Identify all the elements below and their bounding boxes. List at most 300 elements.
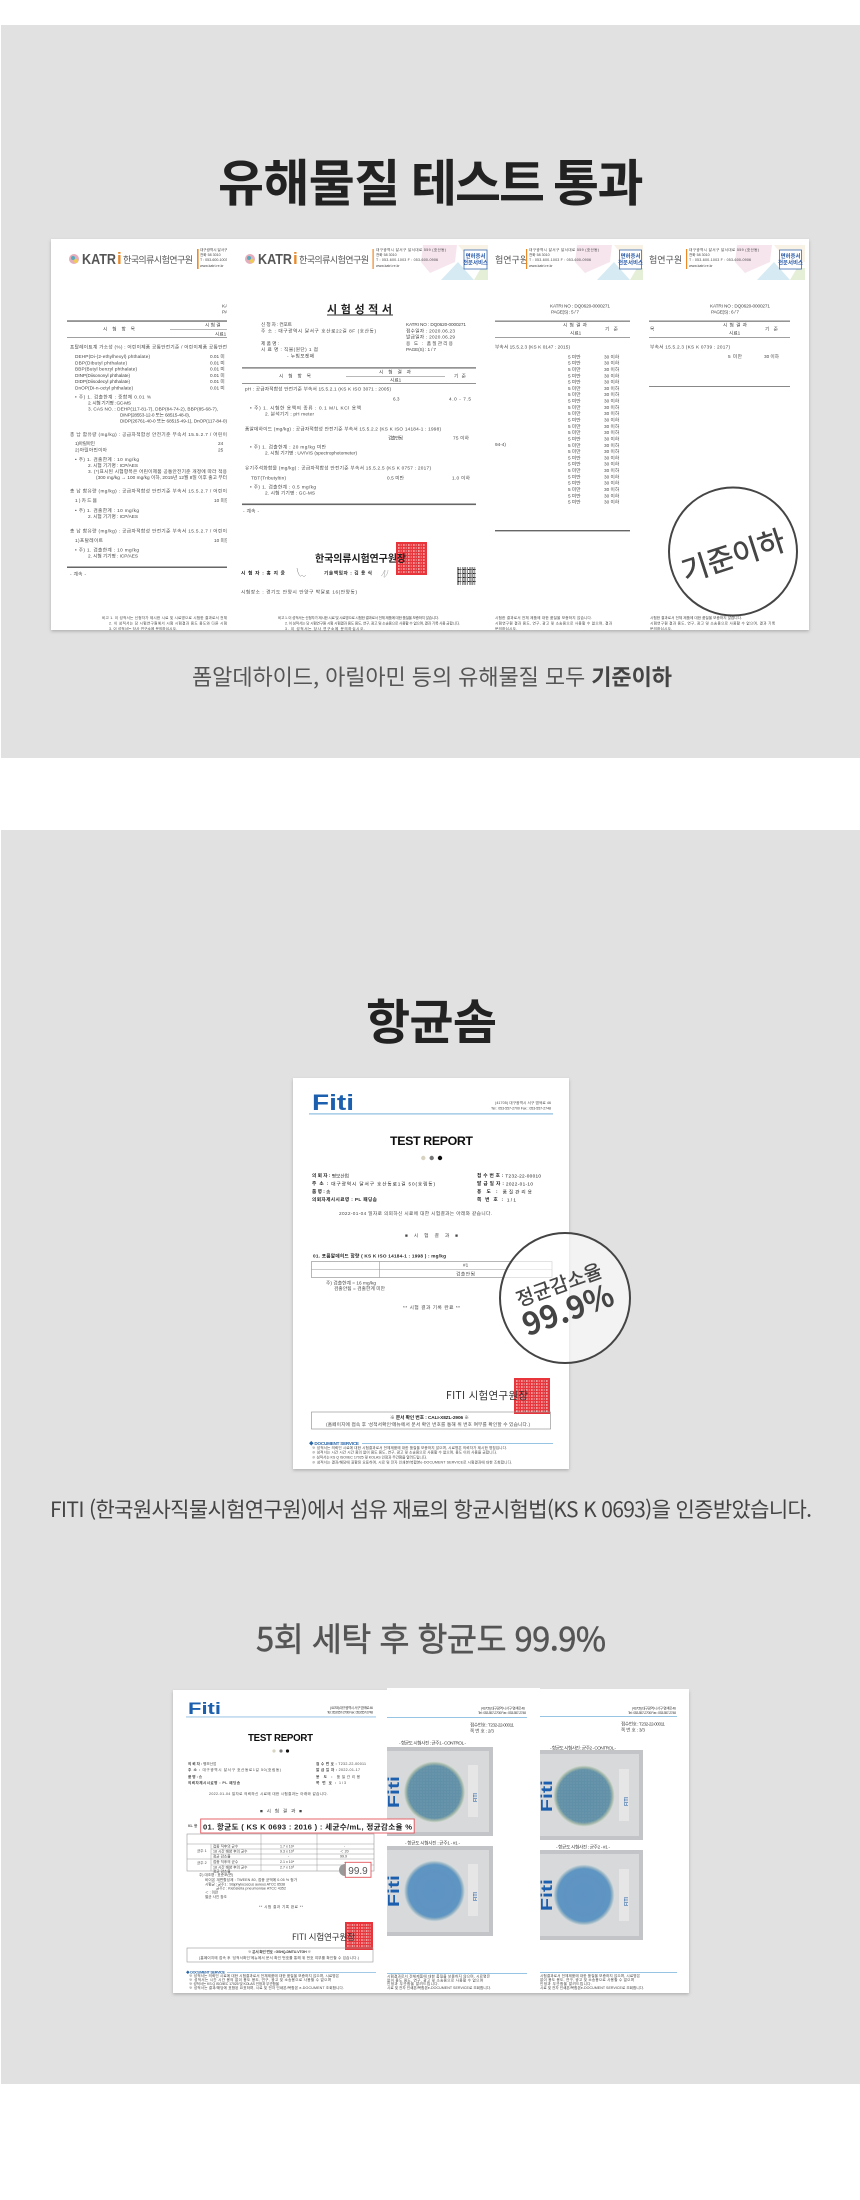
photo: control dish strain 2: Fiti: [539, 1780, 556, 1812]
results table: 정균 감소율: [213, 1854, 231, 1858]
report page 2: main test certificate: 전화 58 3010: [376, 252, 397, 257]
report page 1: 시 험 결: [205, 322, 221, 328]
report page 2: main test certificate: 2. 시험 기기명 : GC-MS: [265, 490, 315, 496]
report page 2: main test certificate: 검출안됨: [388, 434, 403, 442]
report page 2: main test certificate: [227, 239, 495, 631]
wash report page 1: test report with highlighted result: FITI 시험연구원장: [292, 1931, 355, 1943]
report page 2: main test certificate: 0.5 미만: [387, 474, 405, 482]
results table: 정균 감소율: [213, 1868, 231, 1874]
wash report page 1: test report with highlighted result: Fiti: [188, 1699, 221, 1718]
report page 1: 10 미만: [214, 497, 230, 504]
wash report page 2: strain 1 photos: (41705) 대구광역시 서구 염색로 46: [481, 1706, 525, 1710]
report page 3: 대구광역시 달서구 달서대로 559 (호산동): [529, 247, 599, 252]
report page 2: main test certificate: 6.3: [393, 396, 400, 402]
report page 2: main test certificate: 한국의류시험연구원: [299, 255, 369, 265]
report page 1: 비고 1. 이 성적서는 신청자가 제시한 시료 및 시료명으로 시험한 결과로서 전체: [102, 615, 227, 620]
report page 1: 0.01 미: [210, 378, 225, 385]
photo: treated dish strain 2: FITI: [624, 1897, 630, 1906]
stamp: below standard: [669, 488, 797, 616]
report page 2: main test certificate: 유기주석화합물 (mg/kg) : 공급자적합성 안전기준 부속서 15.5.2.5 (KS K 0757 : 2017): [245, 464, 431, 472]
report page 3: 30 이하: [604, 416, 620, 423]
report page 1: PA: [222, 310, 229, 314]
report page 1: 2)아릴아민이아: [75, 446, 108, 454]
report page 3: 5 미만: [568, 479, 581, 486]
report page 4: 면허증서: [781, 252, 800, 260]
report page 2: main test certificate: 용 도 : 품질관리용: [406, 340, 454, 347]
photo: control dish strain 1: Fiti: [386, 1776, 403, 1808]
results table: 접종 직후의 균수: [213, 1844, 239, 1848]
report page 3: 시료1: [570, 330, 582, 336]
report page 3: 5 미만: [568, 441, 581, 448]
report page 3: 5 미만: [568, 473, 581, 480]
report page 1: i: [117, 249, 122, 268]
results table: 접종 직후의 균수: [213, 1859, 239, 1864]
wash report page 1: test report with highlighted result: 의 뢰 자 : 평보산업: [188, 1761, 216, 1766]
callout: antibacterial test item highlight: 01. 항균도 ( KS K 0693 : 2016 ) : 세균수/mL, 정균감소율 %: [203, 1822, 412, 1832]
photo: control dish strain 2: [539, 1750, 643, 1840]
report page 3: 험연구원: [495, 255, 528, 265]
report page 1: KATR: [82, 251, 116, 268]
results table: 2.7 x 10⁶: [280, 1866, 295, 1870]
FITI test report document: ■ 시 험 결 과 ■: [405, 1232, 458, 1239]
report page 2: main test certificate: 시 료 명 : 직물(원단) 1 점: [261, 346, 318, 353]
result table: 검출안됨: [456, 1270, 475, 1278]
FITI test report document: ※ 성적서는 KS Q ISO/IEC 17025 및 KOLAS 인정과 무관함을 알려드립니다.: [312, 1454, 427, 1459]
report page 2: main test certificate: 시 험 결 과: [379, 368, 412, 376]
report page 2: main test certificate: 2. 이 성적서는 당 시험연구원 시험 시험결과 용도 용도, 연구, 광고 및 소송용으로 사용할 수 없으며, 결과 기록 사용 금합니다.: [285, 620, 460, 626]
wash test report pages: [173, 1688, 689, 1993]
report page 1: 25: [218, 448, 224, 452]
report page 1: DIDP(Diisodecyl phthalate): [75, 379, 130, 384]
wash report page 1: test report with highlighted result: ※ 성적서는 결과/해당에 표함된 요표하며, 시료 및 전자 인쇄본/복합본 e-DOCUMENT 조회합니다.: [189, 1985, 344, 1990]
wash report page 3: strain 2 photos: - 항균도 시험사진 : 균주2 - CONTROL -: [550, 1744, 616, 1752]
result table: #1: [463, 1262, 469, 1268]
report page 2: main test certificate: • 주) 1. 검출한계 : 0.5 mg/kg: [250, 484, 316, 490]
wash report page 3: strain 2 photos: 접수번호 : T232-22-00011: [621, 1720, 665, 1728]
seal: KATRI director stamp: [396, 542, 427, 575]
stamp: bacteria reduction rate 99.9%: 정균감소율: [511, 1255, 606, 1313]
report page 1: • 주) 1. 검출한계 : 10 mg/kg: [75, 456, 139, 463]
report page 3: 30 이하: [604, 467, 620, 474]
wash report page 1: test report with highlighted result: 주 소 : 대구광역시 달서구 호산동로1길 50(호림동): [188, 1767, 281, 1772]
wash report page 2: strain 1 photos: - 항균도 시험사진 : 균주1 - #1 -: [405, 1840, 460, 1846]
report page 4: 기 준: [765, 326, 779, 332]
report page 3: 시험연구원 결과 용도, 연구, 광고 및 소송용으로 사용할 수 없으며, 결과: [495, 620, 613, 626]
heading: harmful substance test passed: 유해물질: [218, 144, 413, 216]
FITI test report document: 쪽 번 호 : 1/1: [477, 1196, 516, 1203]
report page 2: main test certificate: 75 이하: [453, 434, 470, 442]
wash report page 2: strain 1 photos: - 항균도 시험사진 : 균주1 - CONTROL -: [399, 1740, 466, 1746]
panel: antibacterial cotton: [1, 830, 860, 2084]
report page 3: 5 미만: [568, 384, 581, 391]
FITI test report document: 의뢰자제시시료명 : PL 패딩솜: [312, 1196, 378, 1203]
report page 3: 5 미만: [568, 486, 581, 492]
report page 4: 대구광역시 달서구 달서대로 559 (호산동): [689, 247, 759, 252]
report page 3: 30 이하: [604, 372, 620, 379]
report page 2: main test certificate: 신 청 자 : 컨포트: [261, 321, 293, 328]
report page 4: [649, 239, 809, 631]
report page 2: main test certificate: 폼알데하이드 (mg/kg) : 공급자적합성 안전기준 부속서 15.5.2.2 (KS K ISO 14184-1 : 1998): [245, 426, 441, 432]
report page 1: 전화 58 3010: [200, 252, 221, 257]
report page 2: main test certificate: 시 험 자 : 홍 지 윤: [241, 570, 286, 576]
wash report page 1: test report with highlighted result: Tel : 053-557-2700 Fax : 053-557-2748: [327, 1710, 373, 1714]
report page 1: 2. 이 성적서는 당 시험연구원에서 시험 시험결과 용도 용도와 다른 시험: [109, 620, 227, 626]
report page 3: 30 이하: [604, 410, 620, 417]
photo: treated dish strain 1: Fiti: [386, 1875, 403, 1907]
report page 3: 30 이하: [604, 448, 620, 455]
FITI test report document: ※ 성적서는 의뢰인 시료에 대한 시험결과로서 전체제품에 대한 품질을 보증하지 않으며, 시료명은 의뢰자가 제시한 명칭입니다.: [312, 1445, 507, 1450]
wash report page 3: strain 2 photos: - 항균도 시험사진 : 균주2 - #1 -: [556, 1844, 610, 1850]
report page 1: 0.01 미: [210, 384, 225, 392]
results table: ＜ 20: [340, 1850, 349, 1854]
report page 3: 5 미만: [568, 403, 581, 410]
FITI test report document: ◆ DOCUMENT SERVICE: [309, 1441, 359, 1446]
wash report page 1: test report with highlighted result: ＜ : 미만: [205, 1890, 219, 1894]
report page 3: 부속서 15.5.2.3 (KS K 0147 : 2015): [495, 344, 570, 350]
report page 3: 5 미만: [568, 467, 581, 474]
report page 1: 1)카드뮴: [75, 497, 98, 504]
report page 2: main test certificate: - 계속 -: [243, 508, 259, 514]
report page 3: 30 이하: [604, 473, 620, 480]
wash report page 1: test report with highlighted result: ※ 성적서는 의뢰인 시료에 대한 시험결과로서 전체제품에 대한 품질을 보증하지 않으며, 시료명은: [189, 1973, 340, 1978]
report page 1: 0.01 미: [210, 360, 225, 366]
report page 3: 전문서비스: [618, 258, 643, 266]
KATRI report pages: [51, 239, 809, 631]
report page 2: main test certificate: KATRI NO : DQ0620-0000271: [406, 322, 466, 327]
report page 3: 30 이하: [604, 454, 620, 461]
report page 1: 3. 이 성적서는 당사 연구소에 문의하십시오.: [109, 626, 177, 631]
report page 3: 30 이하: [604, 441, 620, 448]
report page 3: 30 이하: [604, 359, 620, 366]
report page 2: main test certificate: 기술책임자 : 김 용 식: [324, 570, 372, 576]
report page 1: (300 mg/kg → 100 mg/kg 이하, 2015년 12월 8일 이후 출고 부터: [96, 474, 227, 481]
wash report page 1: test report with highlighted result: (홈페이지에 접속 후 '성적서확인'메뉴에서 문서 확인 번호를 통해 위 번호 여부를 확인할 수 있습니다.): [199, 1955, 359, 1960]
results table: 1.7 x 10⁴: [280, 1844, 295, 1848]
report page 2: main test certificate: 접수일자 : 2020.06.23: [406, 328, 455, 334]
wash report page 2: strain 1 photos: Tel : 053-557-2700 Fax : 053-557-2748: [478, 1711, 526, 1715]
report page 3: 30 이하: [604, 378, 620, 385]
wash report page 1: test report with highlighted result: 주) 대조편 : 표준포(면): [199, 1872, 233, 1877]
report page 2: main test certificate: 대구광역시 달서구 달서대로 559 (호산동): [376, 247, 446, 252]
FITI test report document: ※ 문서 확인 번호 : CALI-X8ZL-2906 ※: [390, 1414, 469, 1421]
report page 2: main test certificate: 주 소 : 대구광역시 달서구 호산로22길 8F (호산동): [261, 328, 376, 334]
report page 1: 3. CAS NO. : DEHP(117-81-7), DBP(84-74-2), BBP(85-68-7),: [88, 406, 218, 412]
report page 2: main test certificate: • 주) 1. 검출한계 : 20 mg/kg 미만: [250, 444, 327, 450]
FITI test report document: 주 소 : 대구광역시 달서구 호산동로1길 50(호림동): [312, 1180, 435, 1187]
report page 4: 전문서비스: [778, 258, 803, 266]
report page 4: 시 험 결 과: [723, 322, 748, 328]
result table: [312, 1262, 552, 1278]
panel: harmful substance test: [1, 25, 860, 758]
report page 3: 5 미만: [568, 429, 581, 436]
report page 1: 2. 시험 기기명 : ICP/AES: [88, 552, 138, 560]
report page 3: 30 이하: [604, 435, 620, 442]
report page 3: 30 이하: [604, 353, 620, 360]
report page 3: 30 이하: [604, 422, 620, 429]
FITI test report document: 품 명 : 솜: [312, 1188, 331, 1194]
wash report page 1: test report with highlighted result: 시험균 : 균주1 : Staphylococcus aureus ATCC 6538: [205, 1882, 285, 1886]
report page 1: DBP(Dibutyl phthalate): [75, 360, 127, 366]
FITI test report document: TEST REPORT: [390, 1134, 473, 1148]
report page 3: 면허증서: [621, 252, 640, 260]
report page 2: main test certificate: 시 험 성 적 서: [327, 302, 392, 316]
report page 1: - 계속 -: [70, 570, 86, 578]
report page 3: PAGE(S) : 5 / 7: [551, 310, 579, 314]
wash report page 2: strain 1 photos: 시험결과로서 전체제품에 대한 품질을 보증하지 않으며, 시료명은: [387, 1974, 491, 1978]
report page 2: main test certificate: 제 품 명 :: [261, 340, 279, 347]
report page 1: 시료1: [215, 332, 227, 336]
report page 4: T : 053-600-1003 F : 053-600-0906: [689, 258, 751, 262]
report page 2: main test certificate: 3. 이 성적서는 당사 연구소에 문의하십시오.: [285, 626, 365, 631]
report page 1: 총 납 함유량 (mg/kg) : 공급자적합성 안전기준 부속서 15.5.2.7 / 어린이: [70, 431, 227, 438]
FITI test report document: ※ 성적서는 시간 시간 시간 용의 없이 용도 용도, 연구, 광고 및 소송용으로 사용할 수 없으며, 용도 이외 사용을 금합니다.: [312, 1450, 497, 1455]
report page 3: 시험한 결과로서 전체 제품에 대한 품질을 보증하지 않습니다.: [495, 615, 592, 620]
heading: harmful substance test passed: 통과: [553, 144, 642, 216]
report page 2: main test certificate: 1.0 이하: [452, 474, 471, 482]
photo: control dish strain 1: [386, 1747, 493, 1836]
report page 1: [67, 248, 227, 630]
report page 1: 1)프탈레이트: [75, 537, 104, 544]
report page 4: 시험한 결과로서 전체 제품에 대한 품질을 보증하지 않습니다.: [650, 615, 742, 620]
report page 1: 0.01 미: [210, 366, 225, 372]
report page 2: main test certificate: TBT(Tributyltin): [251, 476, 286, 480]
stamp: bacteria reduction rate 99.9%: [500, 1233, 630, 1363]
report page 3: 30 이하: [604, 486, 620, 492]
FITI test report document: Tel : 053-557-2700 Fax : 053-557-2748: [491, 1107, 551, 1111]
report page 3: 5 미만: [568, 353, 581, 360]
wash report page 1: test report with highlighted result: 2022-01-04 일자로 의뢰하신 시료에 대한 시험결과는 아래와 같습니다.: [209, 1791, 328, 1796]
FITI test report document: (41705) 대구광역시 서구 염색로 46: [495, 1100, 551, 1105]
report page 2: main test certificate: 면허증서: [466, 252, 485, 260]
report page 3: 30 이하: [604, 498, 620, 505]
report page 1: T : 053-600-1003: [200, 258, 228, 262]
report page 1: 2. 시험 기기명 : ICP/AES: [88, 513, 138, 520]
report page 2: main test certificate: 한국의류시험연구원장: [315, 550, 406, 565]
report page 2: main test certificate: • 주) 1. 시험한 용액의 종류 : 0.1 M/L KCl 용액: [250, 404, 361, 412]
heading: antibacterial cotton: 항균솜: [366, 983, 497, 1053]
wash report page 2: strain 1 photos: 접수번호 : T232-22-00011: [470, 1722, 514, 1728]
report page 3: [495, 239, 649, 631]
report page 3: 30 이하: [604, 391, 620, 398]
caption: FITI certification: FITI (한국원사직물시험연구원)에서 섬유 재료의 항균시험법(KS K 0693)을 인증받았습니다.: [50, 1494, 812, 1524]
report page 3: 시 험 결 과: [563, 322, 588, 328]
wash report page 1: test report with highlighted result: 쪽 번 호 : 1/3: [316, 1780, 346, 1785]
heading: harmful substance test passed: 테스트: [411, 144, 555, 216]
results table: 균주 1: [197, 1849, 207, 1853]
wash report page 2: strain 1 photos: [386, 1688, 540, 1993]
results table: 18 시간 배양 후의 균수: [213, 1848, 248, 1854]
seal: FITI director stamp: [514, 1378, 550, 1414]
wash report page 2: strain 1 photos: 시료 및 전자 인쇄본/복합본e-DOCUMENT SERVICE로 조회합니다.: [387, 1985, 491, 1990]
FITI test report document: 용 도 : 품질관리용: [477, 1188, 533, 1195]
report page 1: DnOP(Di-n-octyl phthalate): [75, 386, 133, 390]
report page 2: main test certificate: T : 053-600-1003 F : 053-600-0906: [376, 258, 438, 262]
report page 3: 5 미만: [568, 365, 581, 372]
report page 4: 전화 58 3010: [689, 252, 710, 257]
wash report page 1: test report with highlighted result: ※ 성적서는 KS Q ISO/IEC 17025 및 KOLAS 인정과 무관함을: [189, 1981, 280, 1986]
stamp: below standard: 기준이하: [675, 518, 790, 591]
report page 3: 5 미만: [568, 422, 581, 429]
report page 1: 한국의류시험연구원: [123, 255, 193, 265]
report page 1: KA: [222, 304, 229, 308]
report page 4: 부속서 15.5.2.3 (KS K 0739 : 2017): [650, 344, 730, 350]
report page 1: 1)아릴아민: [75, 440, 95, 447]
report page 3: 5 미만: [568, 372, 581, 379]
results table: 2.1 x 10⁴: [280, 1860, 295, 1864]
report page 1: 0.01 미: [210, 372, 225, 379]
photo: treated dish strain 1: FITI: [473, 1892, 479, 1901]
results table: -: [344, 1844, 346, 1848]
FITI test report document: (홈페이지에 접속 후 '성적서확인'메뉴에서 문서 확인 번호를 통해 위 번호 여부를 확인할 수 있습니다.): [326, 1421, 530, 1428]
report page 3: T : 053-600-1003 F : 053-600-0906: [529, 258, 591, 262]
report page 3: 5 미만: [568, 397, 581, 404]
report page 1: www.katri.re.kr: [200, 264, 224, 268]
wash report page 1: test report with highlighted result: 의뢰자제시시료명 : PL 패딩솜: [188, 1780, 241, 1785]
report page 1: 프탈레이트계 가소성 (%) : 어린이제품 공통안전기준 / 어린이제품 공통안전: [70, 344, 227, 350]
QR code: [457, 567, 476, 585]
report page 3: 문의하십시오.: [495, 626, 517, 631]
report page 4: 목: [650, 326, 655, 332]
report page 1: 0.01 미: [210, 353, 225, 360]
wash report page 1: test report with highlighted result: ※ 성적서는 시간 시간 용의 없이 용도 용도, 연구, 광고 및 소송용으로 사용할 수 없으며: [189, 1977, 331, 1982]
results table: -: [344, 1860, 346, 1864]
report page 3: 5 미만: [568, 498, 581, 505]
report page 2: main test certificate: 비고 1. 이 성적서는 신청자가 제시한 시료 및 시료명으로 시험한 결과로서 전체 제품에 대한 품질을 보증하지 않습니다.: [278, 615, 439, 620]
subheading: antibacterial after 5 washes: 5회 세탁 후 항균도 99.9%: [256, 1614, 606, 1661]
report page 4: www.katri.re.kr: [689, 264, 713, 268]
report page 2: main test certificate: 2. 시험 기기명 : UV/VIS (spectrophotometer): [265, 450, 357, 456]
report page 3: 5 미만: [568, 492, 581, 499]
report page 3: 30 이하: [604, 365, 620, 372]
report page 2: main test certificate: i: [293, 249, 298, 268]
seal: FITI stamp: [345, 1922, 373, 1950]
report page 3: 기 준: [605, 326, 619, 332]
wash report page 1: test report with highlighted result: 접 수 번 호 : T232-22-00011: [316, 1761, 366, 1766]
report page 3: 5 미만: [568, 359, 581, 366]
FITI test report document: 발 급 일 자 : 2022-01-10: [477, 1180, 533, 1187]
report page 2: main test certificate: PAGE(S) : 1 / 7: [406, 347, 436, 352]
wash report page 1: test report with highlighted result: 품 명 : 솜: [188, 1774, 203, 1779]
stamp: bacteria reduction rate 99.9%: 99.9%: [515, 1270, 619, 1345]
FITI test report document: 접 수 번 호 : T232-22-00010: [477, 1172, 541, 1179]
report page 1: BBP(Butyl benzyl phthalate): [75, 366, 137, 372]
report page 3: 5 미만: [568, 460, 581, 467]
wash report page 3: strain 2 photos: [539, 1689, 689, 1993]
report page 2: main test certificate: - 누빔포켓패: [287, 352, 314, 360]
wash report page 3: strain 2 photos: 시료 및 전자 인쇄본/복합본e-DOCUMENT SERVICE로 조회합니다.: [540, 1985, 644, 1990]
report page 1: 총 납 함유량 (mg/kg) : 공급자적합성 안전기준 부속서 15.5.2.7 / 어린이: [70, 528, 227, 534]
report page 4: 30 이하: [764, 353, 780, 360]
report page 1: • 주) 1. 검출한계 : 10 mg/kg: [75, 546, 139, 554]
report page 1: DEHP(Di-(2-ethylhexyl) phthalate): [75, 354, 150, 359]
wash report page 3: strain 2 photos: (41705) 대구광역시 서구 염색로 46: [632, 1706, 676, 1710]
report page 1: 2. 시험 기기명 : ICP/AES: [88, 462, 138, 469]
report page 1: 3. (*)표시된 시험항목은 어린이제품 공통안전기준 개정에 따라 적용: [88, 468, 228, 475]
photo: control dish strain 2: FITI: [624, 1797, 630, 1806]
wash report page 1: test report with highlighted result: TEST REPORT: [248, 1733, 313, 1744]
results table: 균주 2: [197, 1861, 207, 1865]
report page 4: 험연구원: [649, 255, 682, 265]
report page 3: www.katri.re.kr: [529, 264, 553, 268]
report page 2: main test certificate: KATR: [258, 251, 292, 268]
FITI test report document: 2022-01-04 일자로 의뢰하신 시료에 대한 시험결과는 아래와 같습니다.: [339, 1210, 492, 1217]
report page 1: 24: [218, 441, 224, 446]
wash report page 1: test report with highlighted result: 발 급 일 자 : 2022-01-17: [316, 1767, 360, 1772]
caption: all harmful substances below standard: 폼알데하이드, 아릴아민 등의 유해물질 모두 기준이하: [192, 660, 672, 692]
report page 1: 시 험 항 목: [103, 326, 136, 332]
report page 3: 30 이하: [604, 492, 620, 499]
wash report page 3: strain 2 photos: 인정과 무관함을 알려드립니다.: [540, 1981, 592, 1986]
report page 1: 10 미만: [214, 537, 230, 544]
report page 2: main test certificate: pH : 공급자적합성 안전기준 부속서 15.5.2.1 (KS K ISO 3071 : 2005): [245, 386, 391, 392]
wash report page 3: strain 2 photos: 시험결과로서 전체제품에 대한 품질을 보증하지 않으며, 시료명은: [540, 1973, 641, 1978]
FITI test report document: ※ 성적서는 결과/해당에 표함된 요표하며, 시료 및 전자 인쇄본/복합본e-DOCUMENT SERVICE로 시험결과에 대한 조회합니다.: [312, 1459, 512, 1464]
photo: control dish strain 1: FITI: [473, 1793, 479, 1802]
wash report page 1: test report with highlighted result: ◆ DOCUMENT SERVICE: [186, 1970, 226, 1974]
report page 3: 5 미만: [568, 435, 581, 442]
callout: 99.9 result: [339, 1862, 371, 1877]
report page 3: 94-4): [495, 442, 506, 447]
report page 1: DINP(Diisononyl phthalate): [75, 373, 130, 378]
wash report page 1: test report with highlighted result: 멸균 사진 참조: [205, 1894, 228, 1899]
logo: FITI: Fiti: [312, 1090, 354, 1115]
wash report page 1: test report with highlighted result: [173, 1690, 387, 1993]
results table: 18 시간 배양 후의 균수: [213, 1864, 248, 1870]
wash report page 1: test report with highlighted result: ** 시험 결과 기록 완료 **: [259, 1904, 304, 1909]
results table: -: [288, 1854, 290, 1858]
report page 3: KATRI NO : DQ0620-0000271: [550, 304, 610, 308]
wash report page 1: test report with highlighted result: 비이온 계면활성제 : TWEEN 80, 접종 균액에 0.05 % 첨가: [205, 1877, 298, 1882]
report page 1: DIDP(26761-40-0 또는 68515-49-1), DnOP(117-84-0): [120, 418, 227, 424]
report page 2: main test certificate: 2. 분석기기 : pH meter: [265, 410, 314, 418]
report page 3: 30 이하: [604, 384, 620, 391]
wash report page 1: test report with highlighted result: ■ 시 험 결 과 ■: [260, 1808, 302, 1814]
FITI test report document: 의 뢰 자 : 평보산업: [312, 1172, 349, 1179]
FITI test report document: [293, 1078, 630, 1469]
results table: [187, 1834, 374, 1874]
report page 2: main test certificate: 기 준: [454, 372, 467, 380]
report page 2: main test certificate: 시 험 항 목: [279, 372, 312, 380]
results table: 99.9: [340, 1854, 347, 1858]
report page 3: 30 이하: [604, 479, 620, 486]
FITI test report document: FITI 시험연구원장: [446, 1388, 528, 1403]
report page 4: 문의하십시오.: [650, 626, 672, 631]
report page 3: 30 이하: [604, 403, 620, 410]
FITI test report document: ** 시험 결과 기록 완료 **: [403, 1304, 460, 1311]
report page 2: main test certificate: 시료1: [390, 378, 402, 382]
wash report page 1: test report with highlighted result: (41705) 대구광역시 서구 염색로 46: [330, 1705, 373, 1710]
wash report page 2: strain 1 photos: 쪽 번 호 : 2/3: [470, 1728, 494, 1734]
wash report page 3: strain 2 photos: 없이 용도 용도, 연구, 광고 및 소송용으로 사용할 수 없으며: [540, 1977, 634, 1982]
wash report page 1: test report with highlighted result: 01. 항: [188, 1823, 198, 1828]
photo: treated dish strain 1: [386, 1846, 493, 1936]
report page 2: main test certificate: 전문서비스: [463, 258, 488, 266]
report page 1: 2. 시험 기기명 : GC-MS: [88, 400, 131, 406]
wash report page 1: test report with highlighted result: ※ 문서 확인 번호 : GSHQ-DMTU-VTGH ※: [248, 1949, 311, 1954]
report page 4: KATRI NO : DQ0620-0000271: [710, 304, 770, 308]
report page 4: 시험연구원 결과 용도, 연구, 광고 및 소송용으로 사용할 수 없으며, 결과 기록: [650, 620, 776, 626]
wash report page 3: strain 2 photos: 쪽 번 호 : 3/3: [621, 1726, 645, 1734]
report page 4: PAGE(S) : 6 / 7: [711, 310, 739, 314]
wash report page 2: strain 1 photos: 없이 용도 용도, 연구, 광고 및 소송용으로 사용할 수 없으며: [387, 1978, 483, 1982]
results table: 9.3 x 10⁶: [280, 1850, 295, 1854]
report page 2: main test certificate: 발급일자 : 2020.06.29: [406, 334, 455, 340]
callout: antibacterial test item highlight: [201, 1819, 414, 1833]
FITI test report document: 01. 포름알데히드 함량 ( KS K ISO 14184-1 : 1998 ) : mg/kg: [313, 1252, 446, 1260]
wash report page 2: strain 1 photos: 인정과 무관함을 알려드립니다.: [387, 1981, 439, 1986]
report page 1: 대구광역시 달서구: [200, 247, 228, 252]
FITI test report document: 검출안됨 = 검출한계 미만: [334, 1285, 386, 1292]
